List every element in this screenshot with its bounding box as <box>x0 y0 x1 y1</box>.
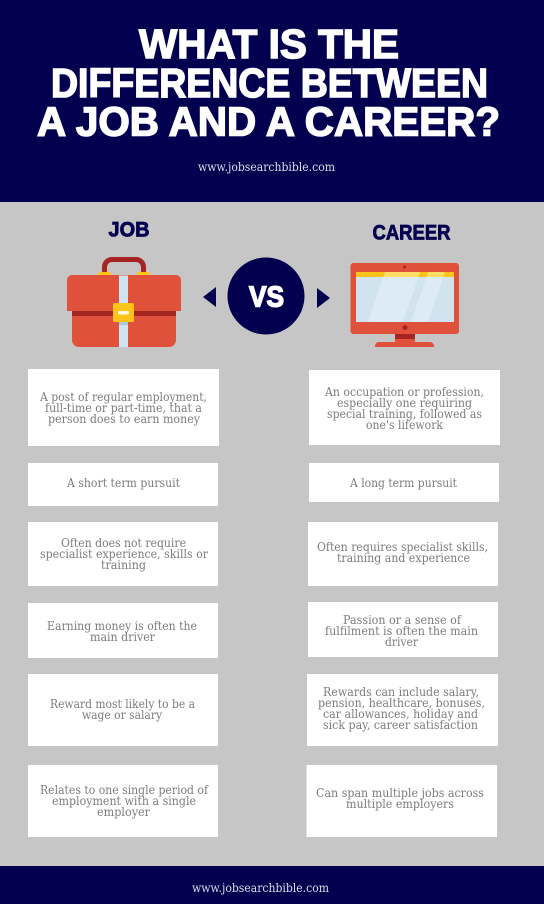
footer banner <box>0 866 544 904</box>
heading: career: CAREER <box>372 222 450 244</box>
job card 6: employer <box>97 804 150 819</box>
job card 5: Reward most likely to be a <box>50 696 195 711</box>
job card 5 <box>28 674 218 746</box>
job card 6 <box>28 765 218 837</box>
career card 2: A long term pursuit <box>349 475 457 490</box>
title: A JOB AND A CAREER? <box>37 98 500 144</box>
career card 5: sick pay, career satisfaction <box>323 717 478 732</box>
career card 4: fulfilment is often the main <box>325 623 478 638</box>
job card 5: wage or salary <box>82 707 163 722</box>
career card 5: pension, healthcare, bonuses, <box>318 695 485 710</box>
title: WHAT IS THE <box>139 21 399 67</box>
arrow: right <box>317 288 330 308</box>
job card 2 <box>28 463 218 506</box>
job card 3: training <box>101 557 146 572</box>
career card 1 <box>309 370 500 445</box>
career card 6: multiple employers <box>346 796 454 811</box>
job card 1: A post of regular employment, <box>39 389 207 404</box>
job card 3: specialist experience, skills or <box>40 546 208 561</box>
job card 3: Often does not require <box>61 535 186 550</box>
career card 4 <box>308 602 498 657</box>
career card 3 <box>308 522 498 586</box>
job card 3 <box>28 522 218 586</box>
header banner <box>0 0 544 202</box>
job card 4: Earning money is often the <box>47 618 197 633</box>
career card 1: one's lifework <box>366 417 443 432</box>
career card 5 <box>307 674 498 746</box>
career card 5: Rewards can include salary, <box>323 684 479 699</box>
career card 5: car allowances, holiday and <box>323 706 478 721</box>
title: DIFFERENCE BETWEEN <box>51 60 488 106</box>
job card 6: Relates to one single period of <box>40 782 209 797</box>
job card 1 <box>28 369 219 446</box>
career card 6 <box>306 765 497 837</box>
job card 6: employment with a single <box>52 793 196 808</box>
job card 1: full-time or part-time, that a <box>45 400 202 415</box>
job card 4: main driver <box>90 629 155 644</box>
career card 1: An occupation or profession, <box>324 384 484 399</box>
career card 3: Often requires specialist skills, <box>317 539 488 554</box>
vs badge <box>228 258 304 334</box>
career card 1: especially one requiring <box>337 395 472 410</box>
footer banner: www.jobsearchbible.com <box>192 880 329 895</box>
career card 3: training and experience <box>337 550 470 565</box>
career card 2 <box>309 463 499 502</box>
header website url: www.jobsearchbible.com <box>198 159 335 174</box>
job card 1: person does to earn money <box>48 411 201 426</box>
arrow: left <box>203 287 216 307</box>
career card 4: driver <box>385 634 418 649</box>
job card 2: A short term pursuit <box>66 475 180 490</box>
icon: briefcase <box>67 260 181 347</box>
career card 4: Passion or a sense of <box>343 612 462 627</box>
vs badge: VS <box>249 282 284 314</box>
career card 6: Can span multiple jobs across <box>316 785 484 800</box>
heading: job: JOB <box>108 218 150 242</box>
job card 4 <box>28 603 218 658</box>
career card 1: special training, followed as <box>327 406 482 421</box>
icon: desktop monitor <box>350 263 459 347</box>
title <box>37 21 500 144</box>
